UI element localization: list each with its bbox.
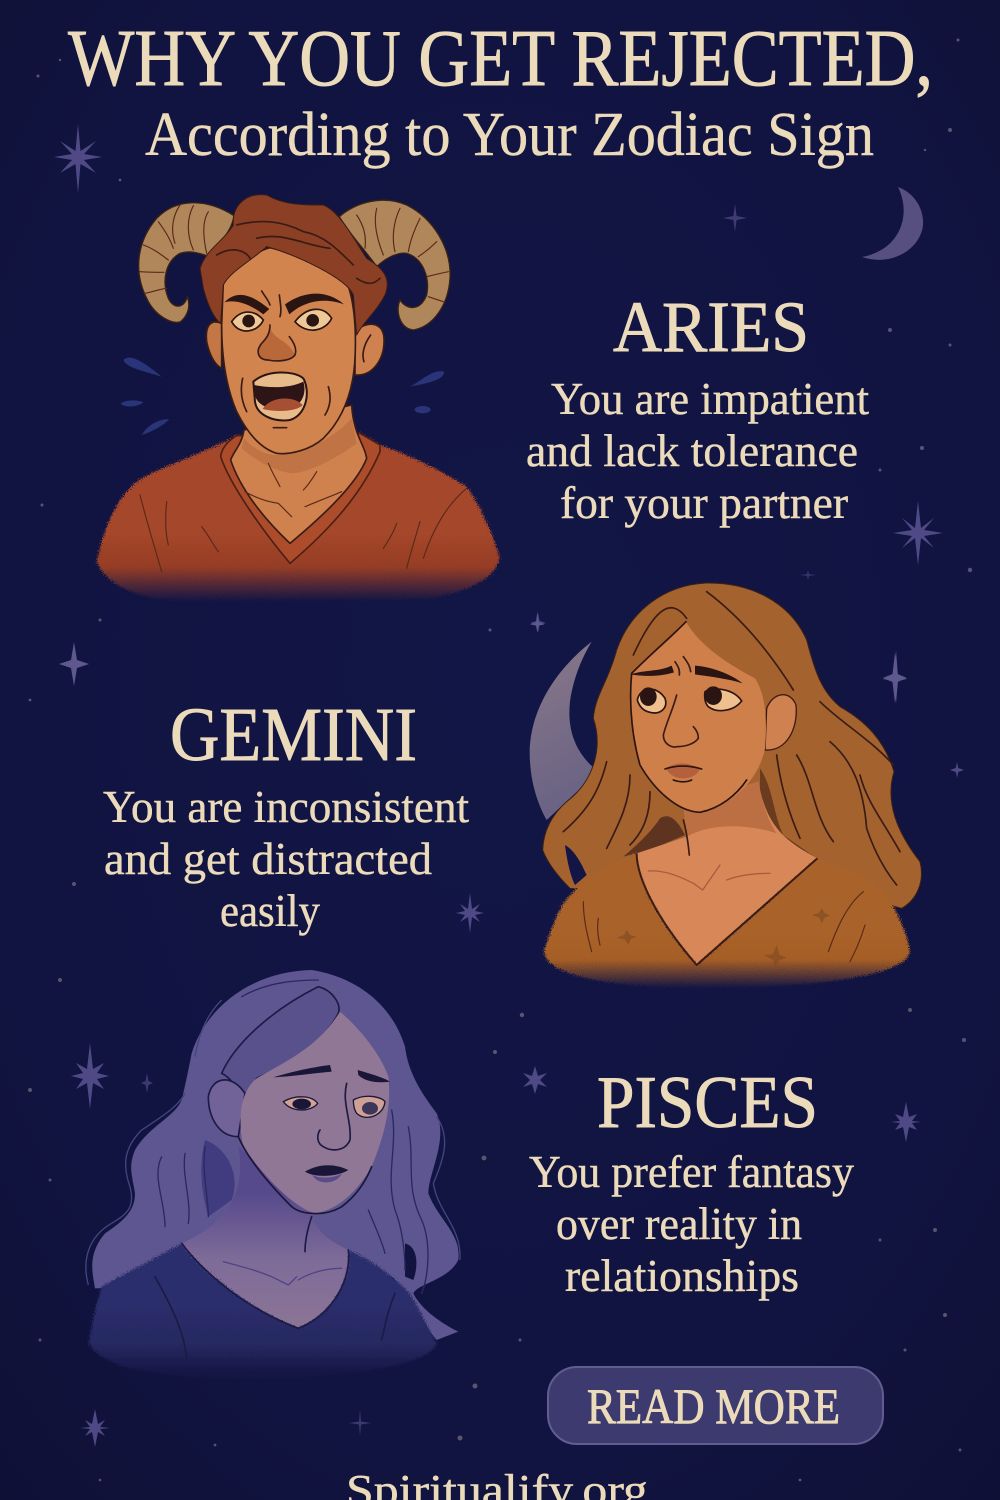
hair strands: [563, 592, 900, 885]
description line 2: and get distracted: [104, 834, 432, 884]
illustration: Pisces sad woman: [86, 970, 460, 1378]
open mouth: [253, 372, 307, 420]
ears: [206, 322, 384, 375]
sign name: ARIES: [613, 287, 809, 367]
description line 2: over reality in: [556, 1199, 802, 1249]
shirt star marks: [617, 908, 830, 967]
ear: [208, 1080, 245, 1137]
small star: [530, 612, 545, 632]
brows and nose: [273, 1065, 390, 1082]
description line 3: relationships: [565, 1251, 799, 1301]
face: [240, 1012, 389, 1213]
description line 3: for your partner: [560, 478, 848, 528]
neck and chest: [182, 1147, 349, 1328]
button label: READ MORE: [587, 1378, 840, 1434]
nose and creases: [259, 328, 295, 361]
shirt collar: [221, 433, 380, 563]
face: [222, 248, 355, 454]
hair: [200, 195, 387, 335]
darker inner hair shading: [623, 816, 685, 857]
mouth: [305, 1165, 348, 1182]
eyes: [232, 309, 332, 331]
brows and nose: [631, 666, 743, 683]
shirt: [88, 1243, 437, 1378]
subtitle: According to Your Zodiac Sign: [145, 101, 874, 169]
eyes: [283, 1096, 385, 1117]
text block: Aries: [526, 287, 869, 528]
description line 1: You are inconsistent: [103, 782, 469, 832]
hair outline strands: [86, 1000, 460, 1285]
left horn: [139, 203, 234, 322]
blue motion marks: [121, 358, 444, 435]
mouth: [665, 763, 702, 782]
sign name: PISCES: [597, 1062, 818, 1144]
crescent moon behind hair: [530, 642, 598, 820]
button shape: [548, 1367, 883, 1444]
icon: crescent moon top right: [862, 187, 923, 260]
shirt: [97, 433, 500, 602]
description line 1: You prefer fantasy: [529, 1147, 854, 1197]
brows: [224, 294, 344, 314]
ear: [765, 695, 796, 750]
button: read more: [548, 1367, 883, 1444]
neck and chest: [637, 782, 817, 965]
description line 1: You are impatient: [551, 374, 869, 424]
right horn: [339, 200, 450, 330]
front hair lock: [222, 987, 339, 1095]
description line 3: easily: [220, 886, 320, 936]
text block: Pisces: [529, 1062, 854, 1301]
illustration: Gemini worried woman with moon: [530, 583, 921, 988]
face: [631, 622, 766, 812]
neck and chest: [231, 405, 367, 543]
back hair: [92, 970, 459, 1340]
long star: [883, 650, 907, 703]
eyes: [637, 686, 742, 713]
sign name: GEMINI: [170, 693, 417, 777]
description line 2: and lack tolerance: [526, 426, 858, 476]
text block: Gemini: [103, 693, 469, 936]
shirt: [544, 853, 910, 988]
back hair: [543, 583, 921, 908]
illustration: Aries angry man with ram horns: [97, 195, 500, 602]
